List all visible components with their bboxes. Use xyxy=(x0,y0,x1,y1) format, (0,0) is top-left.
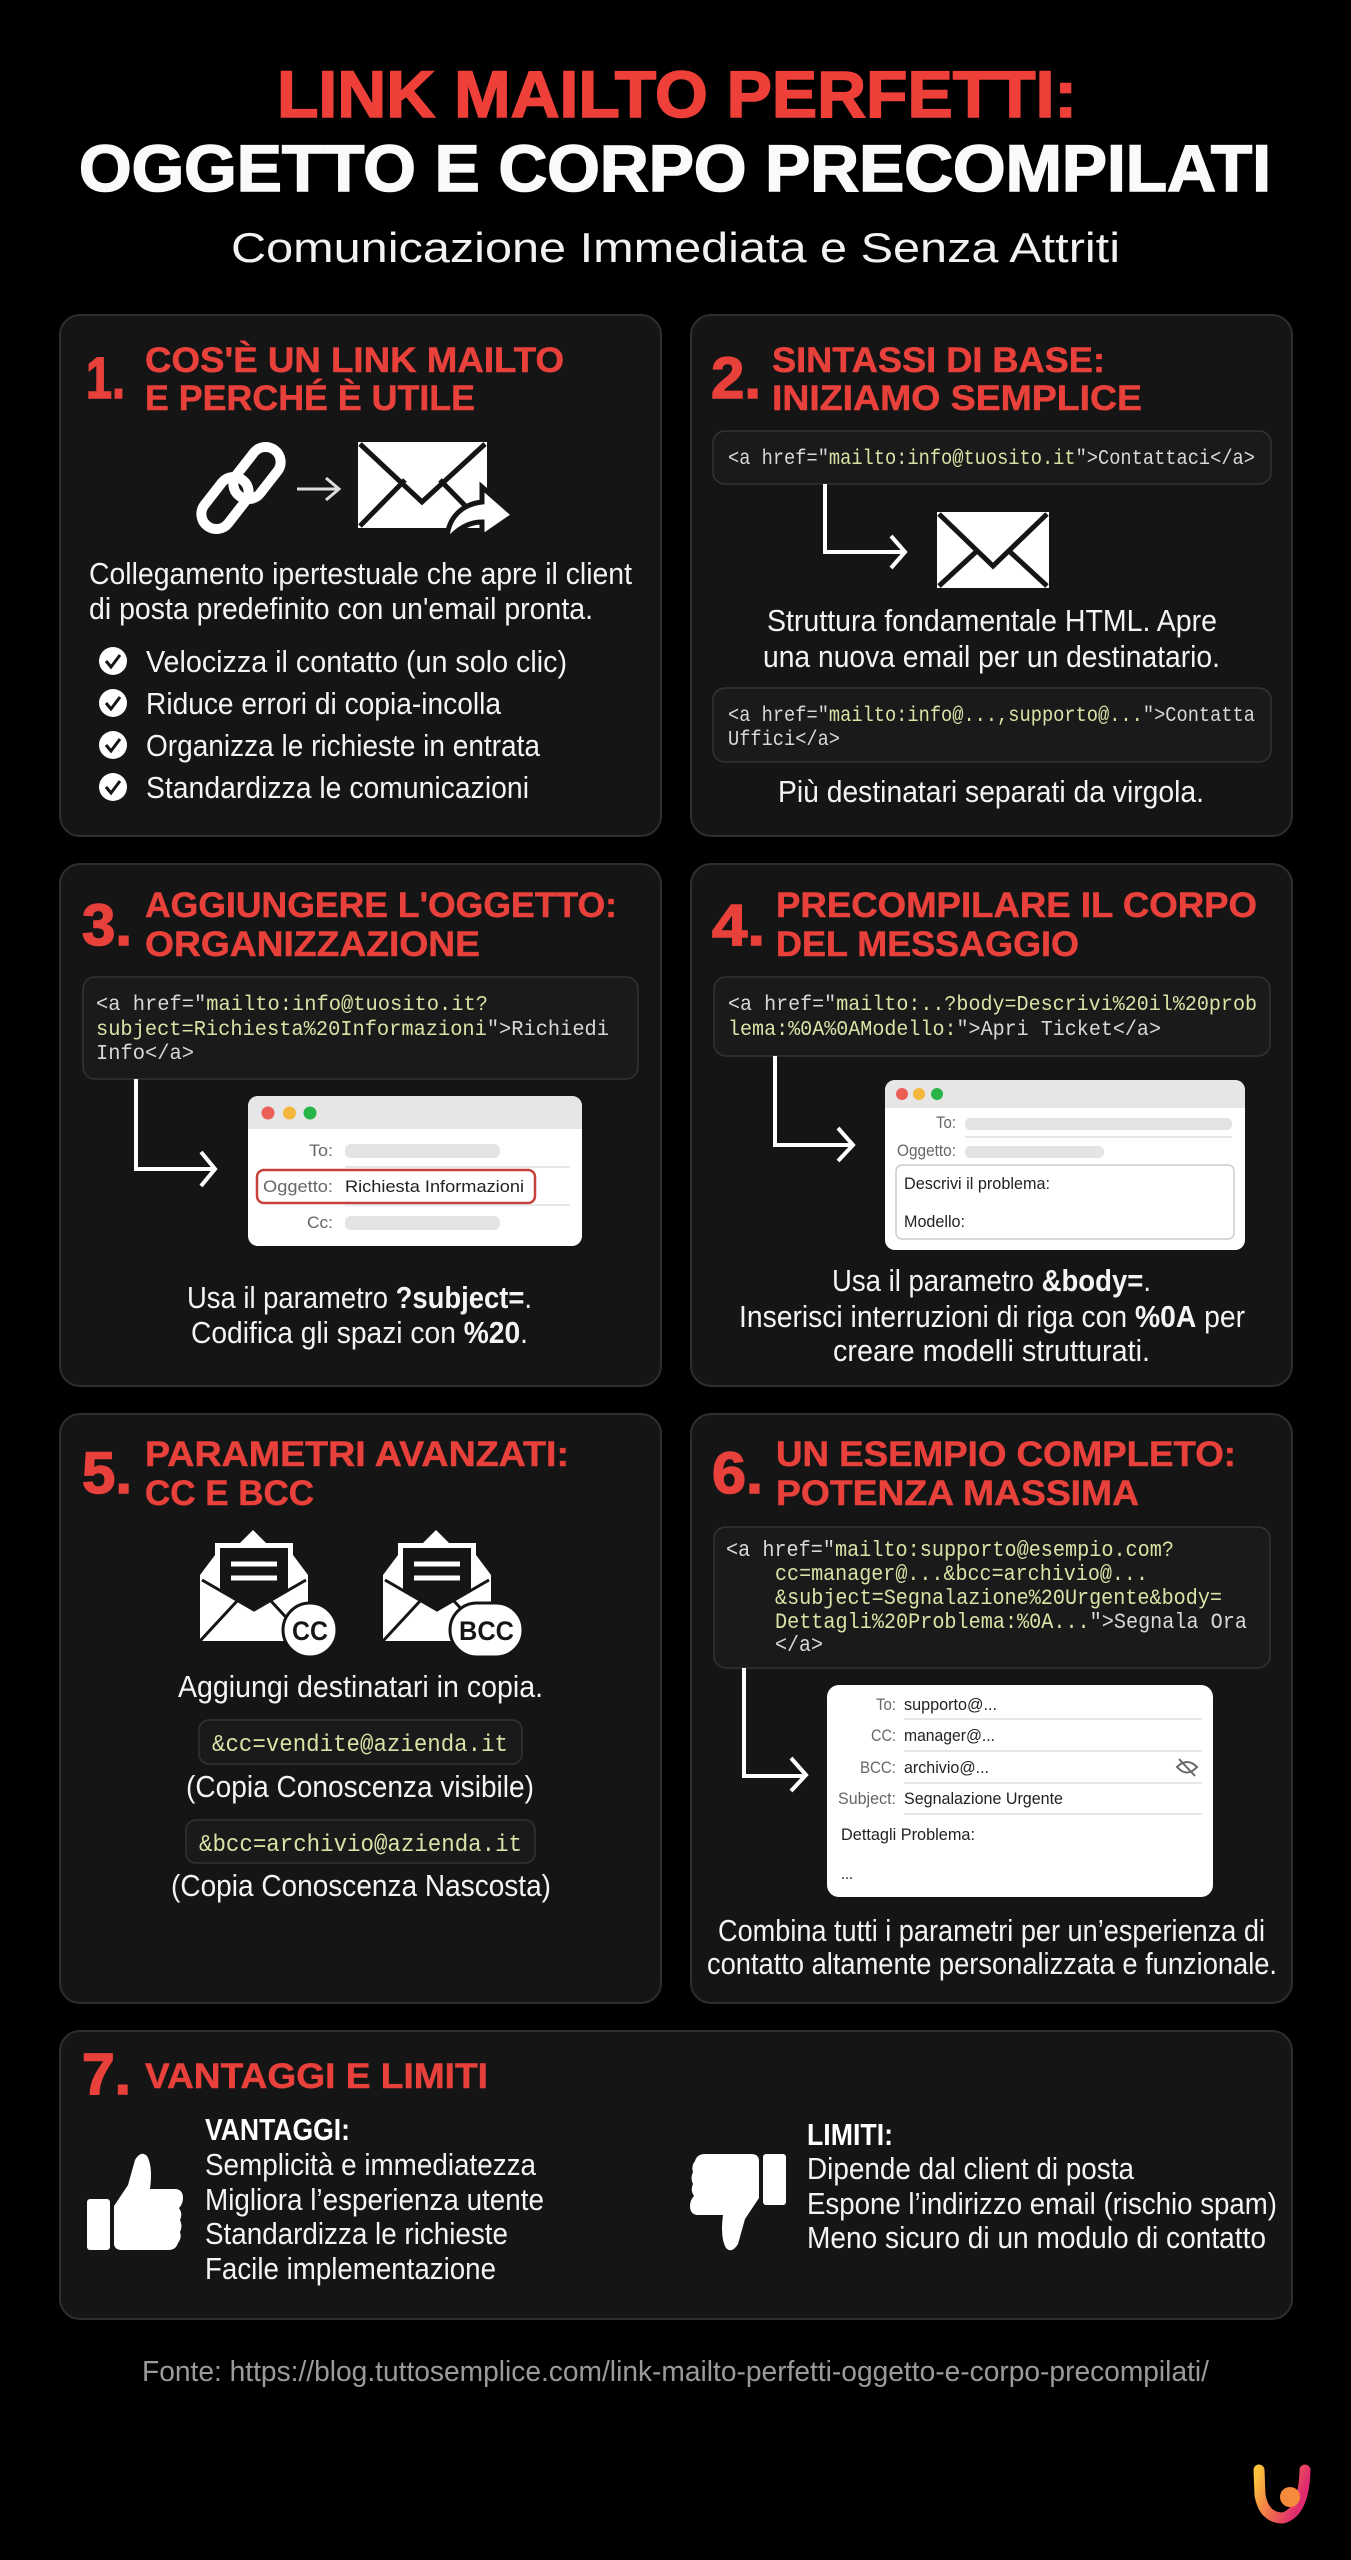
cc note: (Copia Conoscenza visibile) xyxy=(186,1769,534,1804)
panel: 7 vantaggi e limiti xyxy=(60,2031,1292,2319)
code block: basic link xyxy=(713,431,1271,484)
email window: complete: To: xyxy=(876,1695,896,1714)
icon: thumbs up xyxy=(87,2154,183,2250)
bullet list: Riduce errori di copia-incolla xyxy=(146,686,502,721)
email window: body: Descrivi il problema: xyxy=(904,1174,1050,1193)
panel: 3 aggiungere l'oggetto xyxy=(60,864,661,1386)
code block: full example: </a> xyxy=(775,1633,823,1658)
icon: open envelope CC xyxy=(200,1530,337,1657)
email window: complete: manager@... xyxy=(904,1726,995,1745)
arrow xyxy=(136,1079,215,1186)
email window: subject: Oggetto: xyxy=(263,1177,333,1196)
panel: 4 precompilare il corpo xyxy=(691,864,1292,1386)
email window: subject xyxy=(248,1096,582,1246)
vantaggi list: Standardizza le richieste xyxy=(205,2216,508,2251)
description: Inserisci interruzioni di riga con %0A per xyxy=(739,1299,1245,1334)
panel: 1 cos'è un link mailto xyxy=(60,315,661,836)
email window: complete: supporto@... xyxy=(904,1695,997,1714)
email window: complete: Dettagli Problema: xyxy=(841,1825,975,1844)
limiti list: Espone l’indirizzo email (rischio spam) xyxy=(807,2186,1277,2221)
subtitle: Comunicazione Immediata e Senza Attriti xyxy=(231,224,1120,271)
heading 2: SINTASSI DI BASE: xyxy=(772,341,1105,380)
vantaggi list xyxy=(205,2112,544,2286)
description: Collegamento ipertestuale che apre il client xyxy=(89,556,632,591)
email window: body xyxy=(885,1080,1245,1250)
code pill: bcc xyxy=(186,1820,535,1863)
vantaggi list: VANTAGGI: xyxy=(205,2112,350,2147)
bullet list xyxy=(99,644,567,805)
email window: complete: ... xyxy=(841,1864,853,1883)
heading 5: 5. xyxy=(82,1441,132,1506)
icon: open envelope BCC xyxy=(383,1530,523,1657)
arrow xyxy=(744,1668,806,1791)
code block: basic link: <a href="mailto:info@tuosito.it">Contattaci</a> xyxy=(728,448,1255,471)
heading 1: 1. xyxy=(86,346,125,411)
code block: multiple recipients: <a href="mailto:info@...,supporto@...">Contatta xyxy=(728,705,1255,728)
email window: body: Modello: xyxy=(904,1212,965,1231)
heading 6: POTENZA MASSIMA xyxy=(776,1474,1139,1513)
panel: 2 sintassi di base xyxy=(691,315,1292,836)
code pill: cc xyxy=(199,1720,522,1764)
bullet list: Velocizza il contatto (un solo clic) xyxy=(146,644,567,679)
code block: subject: subject=Richiesta%20Informazioni">Richiedi xyxy=(96,1019,609,1042)
email window: complete: BCC: xyxy=(860,1758,896,1777)
panel: 5 parametri avanzati xyxy=(60,1414,661,2003)
heading 6: UN ESEMPIO COMPLETO: xyxy=(776,1435,1236,1474)
title: LINK MAILTO PERFETTI: xyxy=(277,57,1077,131)
heading 7: VANTAGGI E LIMITI xyxy=(145,2057,488,2096)
limiti list: Meno sicuro di un modulo di contatto xyxy=(807,2220,1266,2255)
description: Codifica gli spazi con %20. xyxy=(191,1315,528,1350)
heading 5 xyxy=(82,1435,569,1513)
limiti list: Dipende dal client di posta xyxy=(807,2151,1135,2186)
icon: open envelope CC: CC xyxy=(292,1616,328,1646)
email window: complete: archivio@... xyxy=(904,1758,989,1777)
email window: subject: Richiesta Informazioni xyxy=(345,1177,524,1196)
code block: full example: Dettagli%20Problema:%0A...">Segnala Ora xyxy=(775,1610,1247,1635)
email window: body: To: xyxy=(936,1113,956,1132)
code block: multiple recipients: Uffici</a> xyxy=(728,729,840,752)
vantaggi list: Facile implementazione xyxy=(205,2251,496,2286)
arrow xyxy=(775,1056,853,1161)
email window: body: Oggetto: xyxy=(897,1141,956,1160)
title: OGGETTO E CORPO PRECOMPILATI xyxy=(79,131,1271,205)
heading 7 xyxy=(82,2042,488,2107)
bullet list: Standardizza le comunicazioni xyxy=(146,770,529,805)
heading 1 xyxy=(86,340,564,418)
description xyxy=(187,1280,532,1350)
icon: envelope xyxy=(937,512,1049,588)
code block: subject: <a href="mailto:info@tuosito.it? xyxy=(96,994,488,1017)
email window: complete: Subject: xyxy=(838,1789,896,1808)
code block: full example xyxy=(714,1527,1270,1668)
code block: multiple recipients xyxy=(713,688,1271,762)
code pill: cc: &cc=vendite@azienda.it xyxy=(212,1732,508,1759)
limiti list: LIMITI: xyxy=(807,2117,893,2152)
description: di posta predefinito con un'email pronta. xyxy=(89,591,593,626)
code block: subject: Info</a> xyxy=(96,1043,194,1066)
email window: subject: Cc: xyxy=(307,1213,333,1232)
heading 2: 2. xyxy=(711,346,761,411)
description: Usa il parametro ?subject=. xyxy=(187,1280,532,1315)
code block: full example: &subject=Segnalazione%20Urgente&body= xyxy=(775,1586,1222,1611)
description: creare modelli strutturati. xyxy=(833,1333,1150,1368)
vantaggi list: Semplicità e immediatezza xyxy=(205,2147,537,2182)
description xyxy=(707,1913,1277,1981)
limiti list xyxy=(807,2117,1277,2255)
code pill: bcc: &bcc=archivio@azienda.it xyxy=(199,1832,522,1859)
code block: full example: cc=manager@...&bcc=archivio@... xyxy=(775,1562,1148,1587)
icon: thumbs down xyxy=(690,2154,786,2250)
note: Più destinatari separati da virgola. xyxy=(778,774,1204,809)
description: Struttura fondamentale HTML. Apre xyxy=(767,603,1217,638)
heading 2 xyxy=(711,341,1142,418)
code block: body xyxy=(714,977,1270,1056)
heading 5: PARAMETRI AVANZATI: xyxy=(145,1435,569,1474)
icon: open envelope BCC: BCC xyxy=(459,1616,514,1646)
icon: arrow xyxy=(297,478,339,500)
heading 3: AGGIUNGERE L'OGGETTO: xyxy=(145,886,617,925)
heading 2: INIZIAMO SEMPLICE xyxy=(772,379,1142,418)
description: una nuova email per un destinatario. xyxy=(763,639,1220,674)
heading 4 xyxy=(712,886,1257,964)
logo xyxy=(1259,2470,1305,2518)
description: Combina tutti i parametri per un’esperienza di xyxy=(718,1913,1265,1948)
email window: complete xyxy=(827,1685,1213,1897)
heading 1: COS'È UN LINK MAILTO xyxy=(145,340,564,380)
code block: body: lema:%0A%0AModello:">Apri Ticket</a> xyxy=(728,1019,1161,1042)
title xyxy=(79,57,1271,205)
heading 4: PRECOMPILARE IL CORPO xyxy=(776,886,1257,925)
heading 3 xyxy=(82,886,617,964)
bcc note: (Copia Conoscenza Nascosta) xyxy=(171,1868,551,1903)
description xyxy=(739,1263,1245,1368)
description: Usa il parametro &body=. xyxy=(832,1263,1151,1298)
email window: complete: CC: xyxy=(871,1726,896,1745)
heading 4: DEL MESSAGGIO xyxy=(776,925,1079,964)
heading 5: CC E BCC xyxy=(145,1474,314,1513)
heading 6 xyxy=(712,1435,1236,1513)
description: contatto altamente personalizzata e funzionale. xyxy=(707,1946,1277,1981)
code block: body: <a href="mailto:..?body=Descrivi%20il%20prob xyxy=(728,994,1257,1017)
panel: 6 esempio completo xyxy=(691,1414,1292,2003)
description xyxy=(763,603,1220,674)
email window: complete: Segnalazione Urgente xyxy=(904,1789,1063,1808)
code block: subject xyxy=(83,977,638,1079)
heading 3: ORGANIZZAZIONE xyxy=(145,925,480,964)
code block: full example: <a href="mailto:supporto@esempio.com? xyxy=(726,1538,1174,1563)
icon: envelope with share arrow xyxy=(358,442,514,541)
email window: subject: To: xyxy=(309,1141,333,1160)
bullet list: Organizza le richieste in entrata xyxy=(146,728,541,763)
heading 7: 7. xyxy=(82,2042,131,2107)
source line: Fonte: https://blog.tuttosemplice.com/link-mailto-perfetti-oggetto-e-corpo-precompilati/ xyxy=(142,2356,1210,2388)
heading 6: 6. xyxy=(712,1441,763,1506)
vantaggi list: Migliora l’esperienza utente xyxy=(205,2182,544,2217)
heading 4: 4. xyxy=(712,893,765,958)
heading 1: E PERCHÉ È UTILE xyxy=(145,378,475,418)
description: Aggiungi destinatari in copia. xyxy=(178,1669,543,1704)
icon: chain link xyxy=(195,441,287,535)
arrow xyxy=(825,484,905,568)
heading 3: 3. xyxy=(82,893,132,958)
description xyxy=(89,556,632,626)
